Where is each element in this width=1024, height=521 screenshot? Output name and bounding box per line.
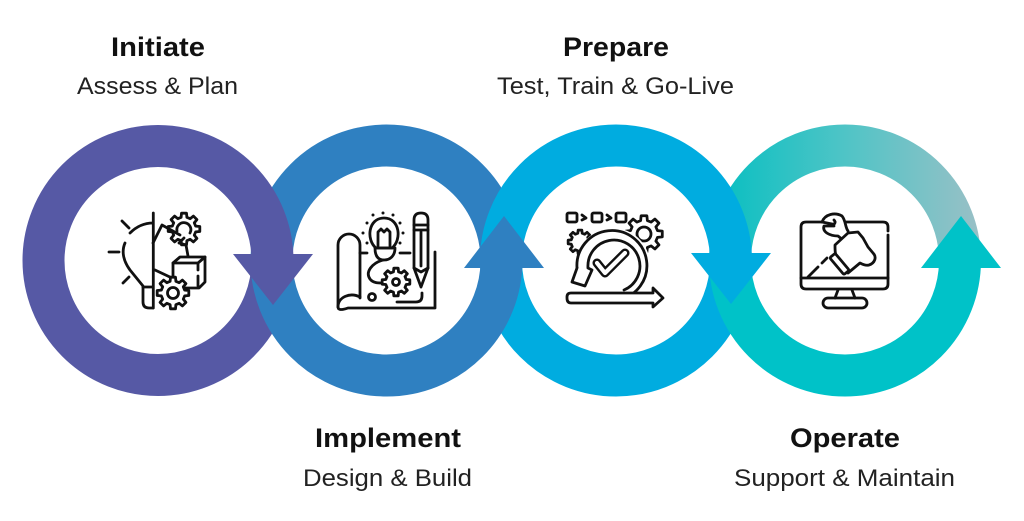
ring: implement lower arc — [252, 268, 522, 396]
icon: agile cycle with check — [567, 213, 663, 307]
heading: operate: Operate — [790, 423, 900, 453]
subheading: test, train and go-live: Test, Train & Go-Live — [497, 73, 734, 100]
heading: initiate: Initiate — [111, 32, 205, 62]
subheading: support and maintain: Support & Maintain — [734, 465, 955, 492]
heading: prepare: Prepare — [563, 32, 669, 62]
arrow: initiate down — [233, 254, 313, 305]
ring: prepare — [501, 146, 731, 376]
ring: operate lower arc — [710, 268, 981, 396]
icon: monitor with wrench in hand — [801, 214, 888, 308]
icon: bulb and gears — [109, 213, 205, 309]
arrow: operate up — [921, 216, 1001, 268]
icon: blueprint, bulb and pencil — [338, 212, 435, 310]
arrow: implement up — [464, 216, 544, 268]
arrow: prepare down — [691, 253, 771, 304]
heading: implement: Implement — [315, 423, 461, 453]
ring: operate upper arc — [709, 124, 980, 253]
ring: implement upper arc — [250, 124, 502, 254]
subheading: assess and plan: Assess & Plan — [77, 73, 238, 100]
subheading: design and build: Design & Build — [303, 465, 472, 492]
ring: initiate — [44, 146, 272, 375]
